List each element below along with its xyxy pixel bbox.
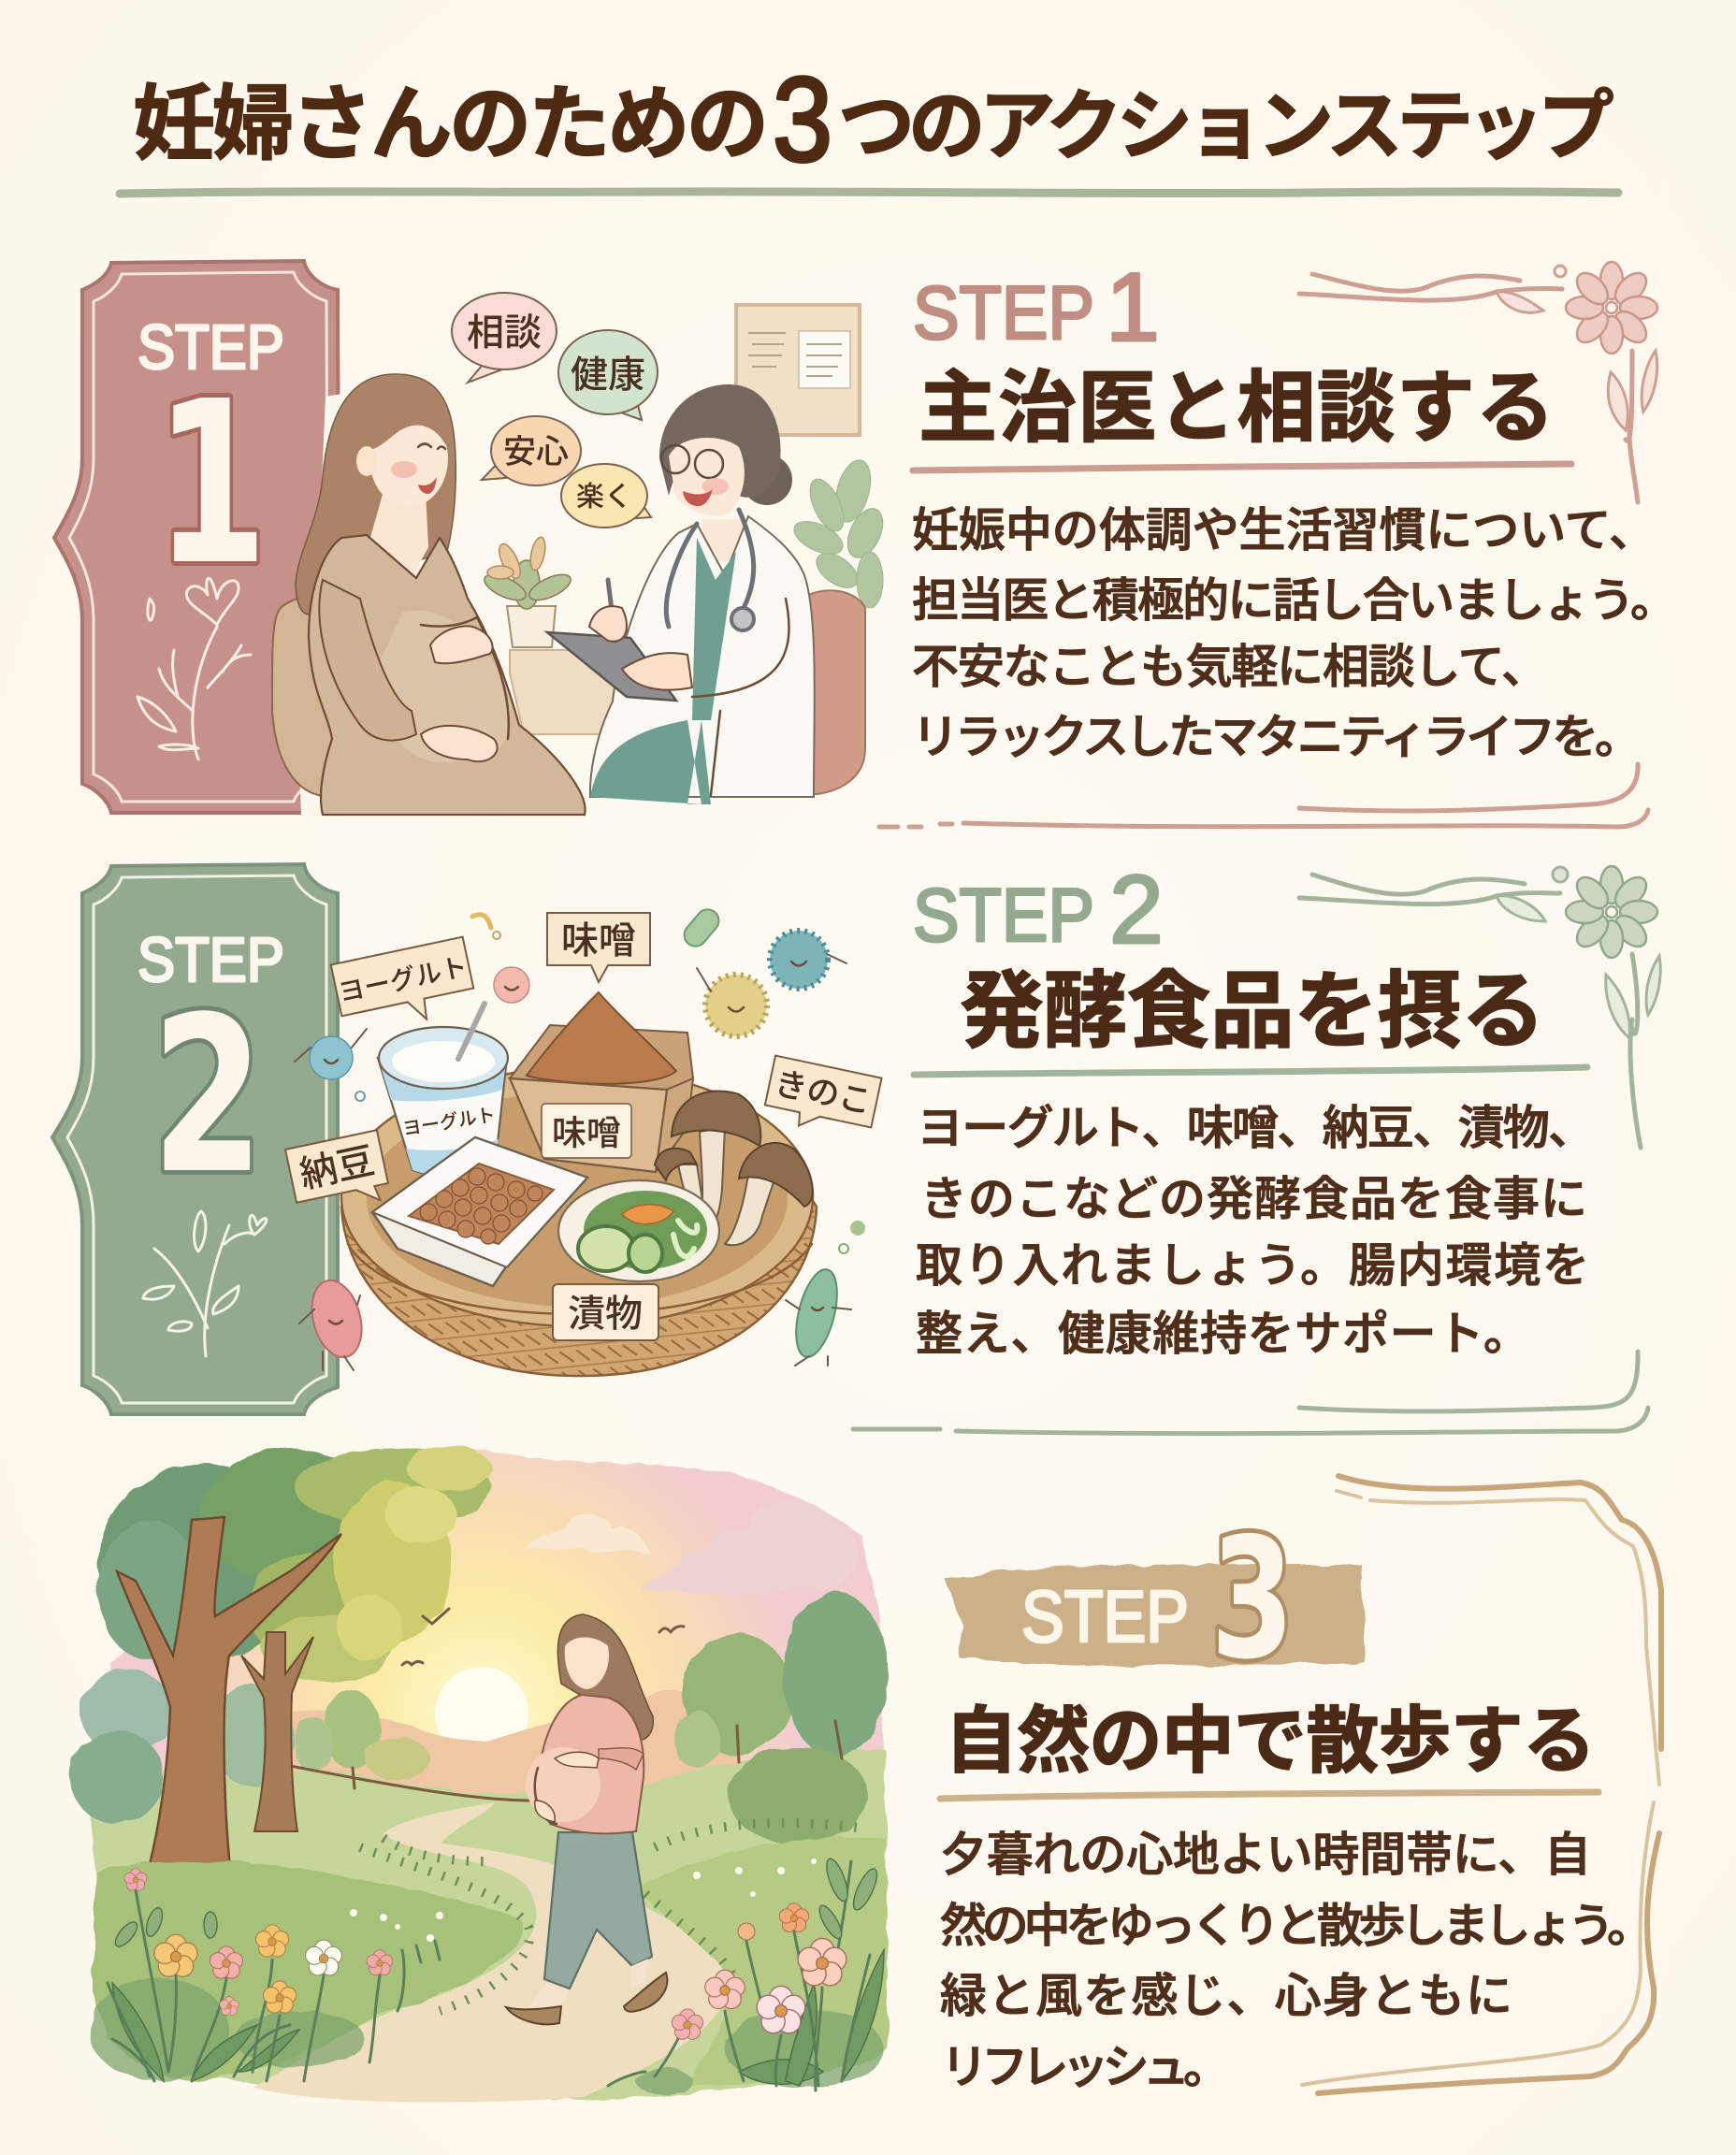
step 1 heading: 主治医と相談する xyxy=(919,364,1555,452)
step 1 underline xyxy=(913,464,1571,470)
label: ヨーグルト: ヨーグルト xyxy=(336,952,470,1007)
step 3 brush label: 3 xyxy=(1210,1502,1295,1696)
doctor xyxy=(547,384,815,804)
step 2 label xyxy=(913,856,1164,964)
right plant xyxy=(789,456,890,608)
table xyxy=(510,650,655,734)
flowers and grass xyxy=(108,1857,884,2090)
step 3 brush label xyxy=(947,1502,1366,1696)
step 2 badge: 2 xyxy=(152,970,264,1221)
bubble: 楽く xyxy=(561,464,651,528)
step 2 bottom flourish xyxy=(853,1352,1648,1434)
sun xyxy=(435,1667,528,1760)
step 3 body xyxy=(940,1829,1654,2093)
step 2 label: 2 xyxy=(1109,856,1164,964)
left chair xyxy=(272,595,343,797)
bubble: 楽く: 楽く xyxy=(576,482,632,513)
table plant xyxy=(481,536,574,647)
miso box xyxy=(510,992,693,1172)
step 3 underline xyxy=(940,1792,1599,1799)
bubble: 相談 xyxy=(452,293,557,383)
step 1 badge: 1 xyxy=(155,354,268,615)
title xyxy=(133,53,1614,187)
panel: step 3 xyxy=(70,1446,1661,2103)
cream halo over badge xyxy=(297,394,344,817)
step 2 body: 整え、健康維持をサポート。 xyxy=(916,1308,1530,1360)
step 2 underline xyxy=(914,1067,1587,1075)
label: 漬物 xyxy=(553,1284,658,1340)
pickle bowl xyxy=(558,1180,719,1281)
title: 妊婦さんのための xyxy=(133,78,769,170)
step 1 body: 妊娠中の体調や生活習慣について、 xyxy=(912,504,1656,557)
step 1 text block xyxy=(879,253,1677,827)
ground xyxy=(89,1749,889,2100)
step 3 body: 緑と風を感じ、心身ともに xyxy=(940,1970,1512,2022)
right meadow xyxy=(636,1837,889,2086)
illustration: fermented foods xyxy=(285,904,882,1376)
step 3 brush label: STEP xyxy=(1021,1575,1189,1657)
grass tufts xyxy=(360,1823,865,2011)
bubble: 安心: 安心 xyxy=(503,434,569,470)
title: 3 xyxy=(773,53,832,187)
panel: step 2 xyxy=(52,856,1660,1434)
foreground meadow xyxy=(94,1861,522,2081)
step 2 heading: 発酵食品を摂る xyxy=(960,965,1545,1059)
step 3 text block xyxy=(940,1476,1661,2093)
step 2 body: 取り入れましょう。腸内環境を xyxy=(916,1239,1589,1292)
step 2 body xyxy=(916,1102,1595,1360)
step 1 badge: STEP xyxy=(137,312,284,383)
step 2 body: きのこなどの発酵食品を食事に xyxy=(920,1173,1587,1225)
meadow dark wash xyxy=(89,1978,884,2094)
step 3 body: 然の中をゆっくりと散歩しましょう。 xyxy=(940,1900,1654,1952)
step 1 body xyxy=(912,504,1677,763)
winding path xyxy=(253,1802,727,2103)
wall frame xyxy=(736,305,860,435)
step 1 bottom flourish xyxy=(879,764,1648,827)
yogurt cup: ヨーグルト xyxy=(401,1104,497,1140)
illustration: consultation xyxy=(272,293,890,815)
tree trunks xyxy=(117,1517,341,1898)
panel: step 1 xyxy=(54,253,1677,827)
miso box: 味噌 xyxy=(552,1114,621,1152)
microbe characters xyxy=(295,904,865,1370)
background bushes xyxy=(70,1592,888,1844)
walking woman xyxy=(506,1614,667,2024)
title underline xyxy=(120,192,1618,194)
label: きのこ xyxy=(762,1056,882,1140)
label: 味噌: 味噌 xyxy=(561,920,636,962)
step 3 heading: 自然の中で散歩する xyxy=(945,1699,1596,1782)
right chair xyxy=(802,590,865,795)
step 1 badge xyxy=(54,261,340,813)
bubble: 健康 xyxy=(558,330,658,420)
step 1 body: 不安なことも気軽に相談して、 xyxy=(912,641,1548,693)
hills xyxy=(292,1690,739,1796)
step 2 text block xyxy=(853,856,1660,1434)
label: 納豆: 納豆 xyxy=(297,1140,378,1196)
step 1 label xyxy=(913,253,1160,362)
clouds xyxy=(523,1501,859,1595)
step 1 flower ornament xyxy=(1299,262,1657,502)
wicker basket xyxy=(341,1068,817,1376)
bubble: 相談: 相談 xyxy=(467,312,542,354)
step 1 label: STEP xyxy=(913,271,1094,355)
bubble: 健康: 健康 xyxy=(571,354,645,396)
step 1 label: 1 xyxy=(1106,253,1160,362)
title: つのアクションステップ xyxy=(838,84,1614,169)
step 1 body: 担当医と積極的に話し合いましょう。 xyxy=(912,574,1677,627)
step 2 flower ornament xyxy=(1299,866,1660,1148)
mushrooms xyxy=(655,1091,813,1245)
sky wash xyxy=(106,1449,885,1796)
natto tray xyxy=(372,1137,587,1286)
step 3 body: リフレッシュ。 xyxy=(941,2041,1230,2093)
yogurt cup xyxy=(378,1004,508,1175)
label: ヨーグルト xyxy=(331,937,478,1036)
pregnant woman xyxy=(296,374,586,815)
label: 納豆 xyxy=(285,1130,391,1217)
step 3 ornate frame xyxy=(1302,1476,1661,2093)
step 1 body: リラックスしたマタニティライフを。 xyxy=(912,711,1642,763)
step 2 badge xyxy=(52,864,338,1414)
illustration: nature walk xyxy=(70,1446,889,2103)
label: 漬物: 漬物 xyxy=(568,1294,643,1335)
step 2 body: ヨーグルト、味噌、納豆、漬物、 xyxy=(917,1102,1595,1154)
label: きのこ: きのこ xyxy=(771,1064,875,1121)
birds xyxy=(402,1609,684,1665)
step 3 body: 夕暮れの心地よい時間帯に、自 xyxy=(940,1829,1591,1881)
label: 味噌 xyxy=(547,913,650,982)
step 2 badge: STEP xyxy=(137,925,284,995)
step 2 label: STEP xyxy=(913,874,1094,958)
canopy xyxy=(98,1446,491,1682)
bubble: 安心 xyxy=(482,416,581,485)
